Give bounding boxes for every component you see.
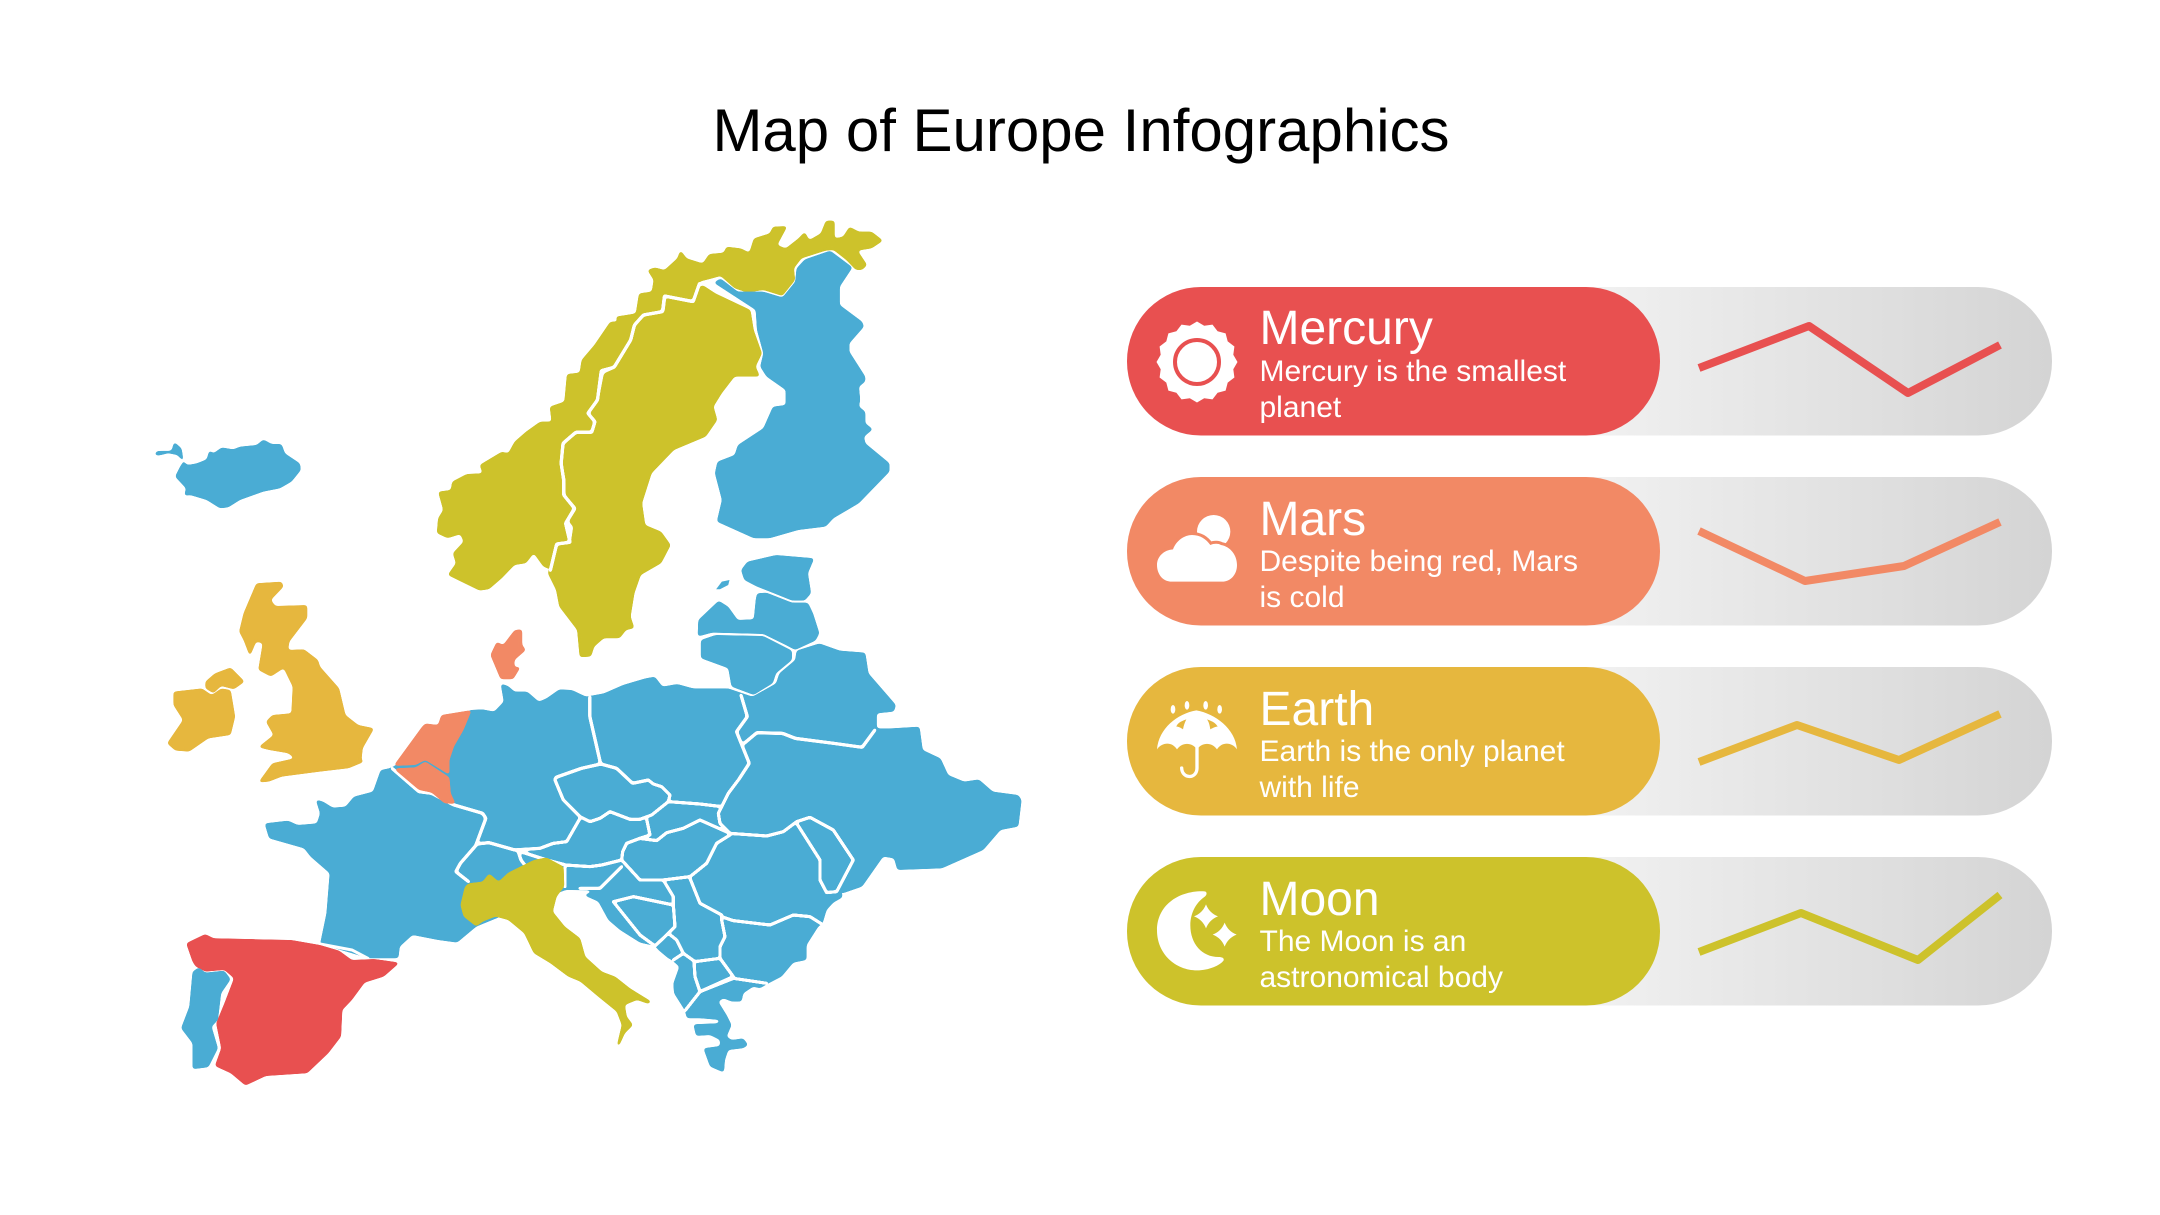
icon: cloud bbox=[1157, 515, 1237, 582]
panel: Moon bbox=[1127, 857, 2052, 1006]
icon: moon and stars bbox=[1157, 891, 1237, 970]
trend line bbox=[1699, 895, 2000, 960]
trend line bbox=[1699, 522, 2000, 581]
colored pill bbox=[1127, 287, 1660, 436]
title: Map of Europe Infographics bbox=[712, 97, 1450, 164]
blue countries mass bbox=[265, 643, 1022, 958]
gray track bbox=[1127, 667, 2052, 816]
panel: Mercury bbox=[1127, 287, 2052, 436]
Sweden bbox=[548, 285, 762, 657]
Norway bbox=[437, 221, 883, 591]
Ireland bbox=[167, 688, 235, 752]
Balkans and southeast Europe bbox=[540, 780, 853, 1073]
Estonian island bbox=[716, 580, 730, 589]
United Kingdom bbox=[239, 582, 374, 783]
description: astronomical body bbox=[1260, 961, 1503, 994]
Finland bbox=[714, 251, 890, 538]
colored pill bbox=[1127, 667, 1660, 816]
icon: umbrella bbox=[1157, 701, 1237, 776]
colored pill bbox=[1127, 857, 1660, 1006]
gray track bbox=[1127, 857, 2052, 1006]
Balkan borders bbox=[540, 780, 853, 1011]
western and central Europe bbox=[167, 643, 1022, 958]
Spain bbox=[186, 934, 400, 1086]
description: Mercury is the smallest bbox=[1260, 355, 1566, 388]
trend line bbox=[1699, 326, 2000, 393]
northern Europe bbox=[239, 221, 890, 783]
Lithuania bbox=[701, 635, 792, 695]
Denmark bbox=[490, 629, 526, 679]
Norway and Sweden border bbox=[550, 283, 700, 571]
description: planet bbox=[1260, 391, 1342, 424]
description: Earth is the only planet bbox=[1260, 735, 1565, 768]
Northern Ireland bbox=[205, 667, 245, 693]
heading: Mars bbox=[1260, 493, 1366, 546]
description: with life bbox=[1258, 771, 1360, 804]
heading: Earth bbox=[1260, 683, 1374, 736]
gray track bbox=[1127, 287, 2052, 436]
Iceland bbox=[154, 439, 301, 508]
Netherlands bbox=[393, 710, 472, 775]
description: is cold bbox=[1260, 581, 1345, 614]
western Europe overlays bbox=[181, 695, 875, 1086]
map of Europe bbox=[154, 221, 1022, 1086]
panel: Mars bbox=[1127, 477, 2052, 626]
country borders bbox=[392, 695, 875, 882]
gray track bbox=[1127, 477, 2052, 626]
description: Despite being red, Mars bbox=[1260, 545, 1578, 578]
Latvia bbox=[698, 593, 819, 650]
description: The Moon is an bbox=[1260, 925, 1466, 958]
icon: sun bbox=[1156, 322, 1238, 402]
heading: Mercury bbox=[1260, 302, 1433, 355]
Balkan mass bbox=[565, 877, 843, 1073]
Portugal bbox=[181, 967, 231, 1069]
heading: Moon bbox=[1260, 873, 1380, 926]
Andorra area bbox=[320, 944, 368, 958]
colored pill bbox=[1127, 477, 1660, 626]
panel: Earth bbox=[1127, 667, 2052, 816]
Italy bbox=[460, 857, 652, 1046]
Belgium bbox=[393, 761, 456, 804]
trend line bbox=[1699, 714, 2000, 762]
Estonia bbox=[741, 555, 814, 601]
